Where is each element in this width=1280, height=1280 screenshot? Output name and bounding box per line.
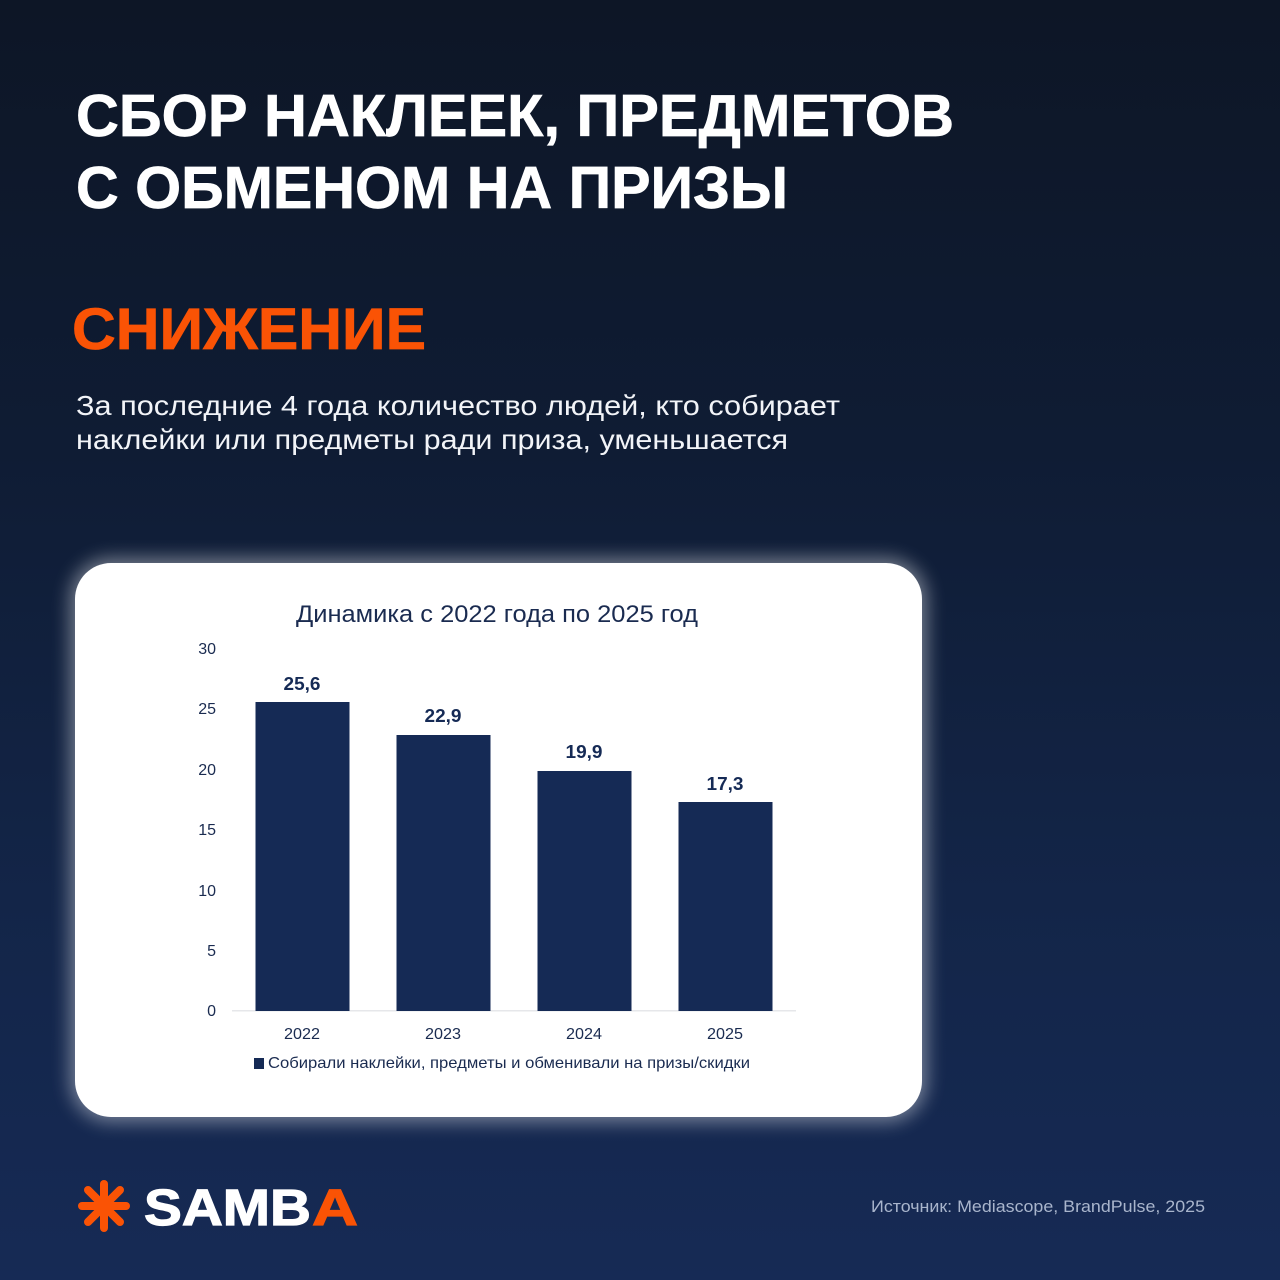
logo: Samba [82, 1179, 358, 1236]
x axis labels [284, 1026, 743, 1043]
y axis labels: 0 [207, 1003, 216, 1020]
heading: decline: СНИЖЕНИЕ [72, 297, 426, 362]
axis line [232, 1010, 796, 1012]
title [76, 83, 954, 221]
wordmark: SAMB [144, 1179, 311, 1236]
value labels [284, 674, 744, 794]
panel: chart card [75, 563, 922, 1117]
y axis labels: 20 [198, 762, 216, 779]
y axis labels: 30 [198, 641, 216, 658]
text block: description: наклейки или предметы ради приза, уменьшается [76, 424, 788, 455]
value labels: 17,3 [706, 774, 744, 794]
legend: Собирали наклейки, предметы и обменивали на призы/скидки [268, 1055, 750, 1072]
value labels: 19,9 [566, 742, 602, 762]
y axis labels: 10 [198, 883, 216, 900]
x axis labels: 2023 [425, 1026, 461, 1043]
x axis labels: 2024 [566, 1026, 602, 1043]
chart title: Динамика с 2022 года по 2025 год [296, 601, 698, 628]
y axis labels: 15 [198, 822, 216, 839]
x axis labels: 2022 [284, 1026, 320, 1043]
bar chart [198, 601, 796, 1072]
text block: description: За последние 4 года количество людей, кто собирает [76, 390, 840, 421]
text block: description [76, 390, 840, 455]
y axis labels: 5 [207, 943, 216, 960]
icon: asterisk [82, 1184, 126, 1228]
bars [256, 702, 772, 1011]
title: С ОБМЕНОМ НА ПРИЗЫ [76, 155, 788, 221]
value labels: 22,9 [424, 706, 462, 726]
source note: Источник: Mediascope, BrandPulse, 2025 [871, 1198, 1205, 1216]
title: СБОР НАКЛЕЕК, ПРЕДМЕТОВ [76, 83, 954, 149]
wordmark: A [312, 1179, 358, 1236]
value labels: 25,6 [284, 674, 320, 694]
y axis labels [198, 641, 216, 1020]
x axis labels: 2025 [707, 1026, 743, 1043]
y axis labels: 25 [198, 701, 216, 718]
